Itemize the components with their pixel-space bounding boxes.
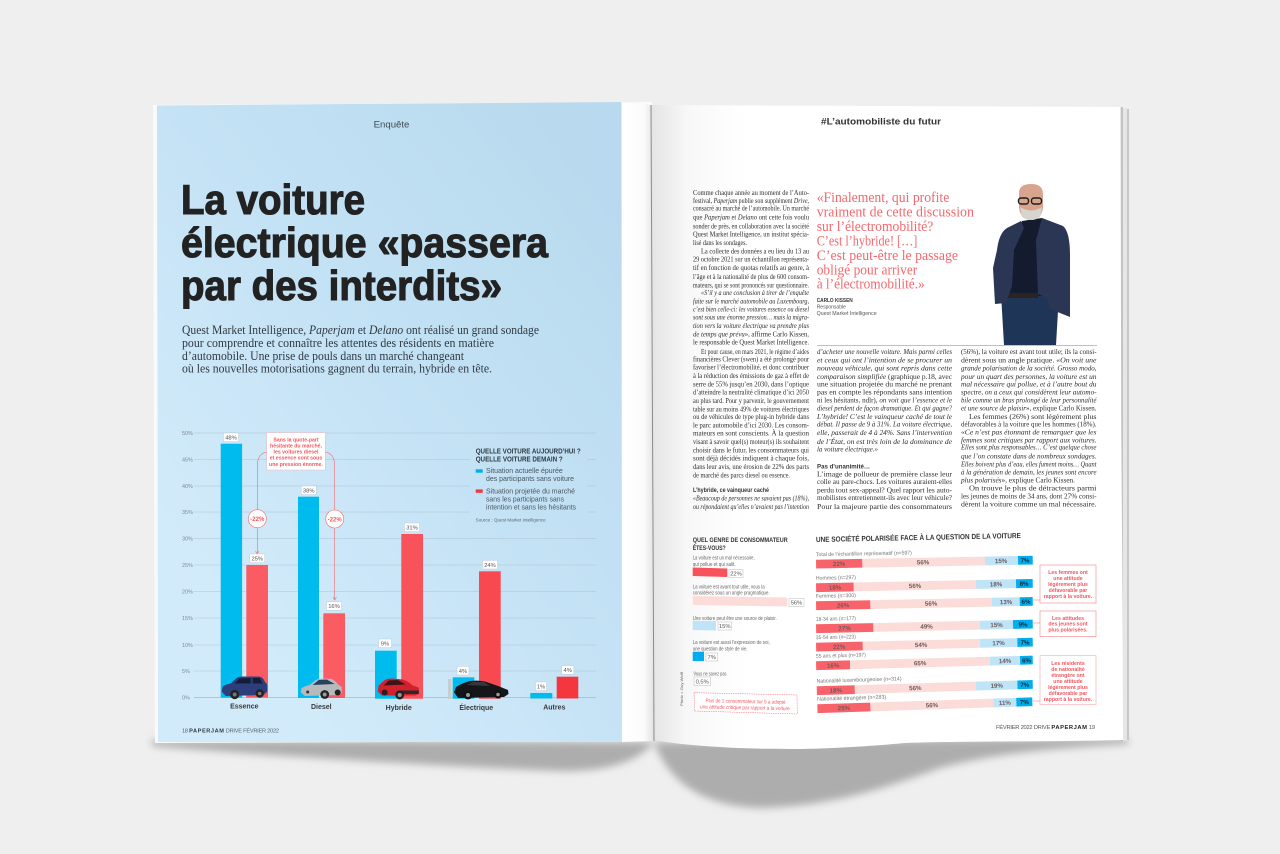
row: nationalite luxembourgeoise: 19% — [990, 683, 1004, 690]
polarised society chart — [816, 531, 1096, 713]
callout: femmes: défavorable par — [1049, 588, 1087, 594]
car: electrique and charger — [448, 679, 508, 699]
page edge stack — [1120, 107, 1129, 741]
badge: diesel -22% — [326, 510, 344, 528]
article column 3: grande polarisation de la société. Grosso modo, — [961, 364, 1097, 373]
row: plaisir — [693, 616, 777, 630]
intro text: pour comprendre et connaître les attentes des résidents en matière — [182, 336, 494, 350]
article column 2: une situation projetée du marché ne prenant — [817, 379, 953, 388]
callout: residents etrangers: légèrement plus — [1048, 685, 1088, 691]
car: essence — [222, 676, 267, 699]
article column 1: mateurs en sont conscients. À la question — [693, 428, 809, 438]
article column 1: favoriser l’électromobilité, et donc contribuer — [693, 363, 809, 372]
row: 35-54 ans: 35-54 ans (n=223) — [816, 634, 856, 641]
article column 2: perdu tout sex-appeal? Quel rapport les auto- — [817, 485, 952, 494]
row: ne sait pas: Vous ne savez pas — [694, 672, 727, 678]
diesel bars — [298, 497, 345, 698]
article column 1: sonder de près, en collaboration avec la société — [693, 221, 809, 230]
category labels — [230, 703, 565, 712]
row: nationalite luxembourgeoise: Nationalité luxembourgeoise (n=314) — [816, 676, 902, 685]
article column 1: serre de 55% jusqu’en 2030, dans l’optique — [693, 379, 810, 388]
page shadows — [152, 738, 1128, 808]
row: plaisir: Une voiture peut être une source de plaisir. — [693, 616, 777, 622]
row: 18-34 ans — [816, 612, 1033, 633]
callout: femmes: Les femmes ont — [1048, 570, 1088, 576]
row: nationalite etrangere: 25% — [838, 705, 851, 712]
article column 2 — [816, 347, 953, 511]
value tags: 16% — [328, 604, 340, 610]
article column 1: le parc automobile d’ici 2030. Les consom- — [693, 420, 809, 429]
autres bars — [530, 677, 578, 698]
chart heading: ÊTES-VOUS? — [693, 543, 726, 552]
callout: 1 consommateur sur 5: une attitude critique par rapport à la voiture. — [700, 704, 791, 712]
pull quote: «Finalement, qui profite — [817, 190, 949, 206]
row: 35-54 ans: 22% — [833, 644, 846, 651]
car: hybride — [378, 678, 419, 699]
article column 2: nouveau véhicule, qui sont repris dans cette — [817, 364, 953, 373]
right page — [651, 105, 1129, 749]
article column 1: ou répondaient qu’elles n’avaient pas l’intention — [693, 502, 809, 511]
row: utile — [693, 584, 804, 607]
article column 3: Les femmes (26%) sont légèrement plus — [969, 412, 1096, 421]
callout — [267, 433, 325, 470]
article column 3: les jeunes de moins de 34 ans, dont 27% consi- — [961, 491, 1097, 500]
callout: residents etrangers: rapport à la voiture. — [1044, 697, 1093, 703]
section label: Enquête — [374, 120, 409, 130]
article column 1: La collecte des données a eu lieu du 13 au — [701, 246, 809, 255]
article column 1: consacré au marché de l’automobile. Un marché — [693, 204, 809, 213]
y axis and grid: 30% — [182, 537, 193, 543]
row: femmes: 26% — [837, 602, 850, 610]
chart heading — [693, 537, 788, 552]
row: hommes: Hommes (n=297) — [816, 575, 856, 582]
callout: femmes: rapport à la voiture. — [1044, 594, 1093, 600]
row: hommes: 18% — [829, 584, 842, 592]
article column 3: mal nécessaire qui pollue, et à l’autre bout du — [961, 379, 1097, 388]
article column 2: ni les hésitants, ndlr), on voit que l’essence et le — [817, 395, 953, 404]
callout: hésitante du marché, — [270, 444, 323, 450]
category labels: Autres — [543, 704, 565, 712]
category labels: Essence — [230, 704, 259, 710]
article column 2: d’acheter une nouvelle voiture. Mais parmi celles — [817, 347, 952, 356]
article column 1: faite sur le marché automobile au Luxembourg, — [693, 297, 809, 306]
article column 3: à la génération de demain, les jeunes sont encore — [961, 468, 1097, 477]
article column 1: Et pour cause, en mars 2021, le régime d’aides — [701, 347, 809, 356]
article column 1: sont sous une énorme pression… mais la migra- — [693, 313, 809, 322]
row: nationalite etrangere: 56% — [926, 702, 939, 709]
row: total: 56% — [917, 559, 930, 567]
row: 55 ans et plus: 14% — [999, 658, 1012, 665]
left page — [153, 102, 654, 743]
article column 1: financières Clever (swen) a été prolongé pour — [693, 355, 809, 364]
article column 1: que Paperjam et Delano ont cette fois voulu — [693, 213, 809, 222]
callout: femmes: légèrement plus — [1048, 582, 1088, 588]
intro text: Quest Market Intelligence, Paperjam et Delano ont réalisé un grand sondage — [182, 323, 539, 337]
y axis and grid: 35% — [182, 510, 193, 516]
row: total: 22% — [833, 561, 846, 568]
page header: #L’automobiliste du futur — [821, 116, 941, 126]
car: diesel — [301, 678, 342, 699]
article column 1 — [693, 188, 810, 511]
row: 55 ans et plus: 6% — [1022, 657, 1032, 665]
article column 1: au plus tard. Pour y parvenir, le gouvernement — [693, 396, 810, 405]
value tags: 1% — [537, 684, 545, 690]
callout: femmes: une attitude — [1053, 576, 1083, 582]
row: 18-34 ans: 15% — [990, 622, 1003, 629]
value tags: 24% — [484, 563, 496, 569]
article column 3: plus polarisés», explique Carlo Kissen. — [960, 476, 1075, 485]
article column 1: de temps que prévu», affirme Carlo Kissen, — [693, 330, 809, 339]
badge: essence -22%: -22% — [250, 517, 265, 523]
row: femmes: 56% — [925, 601, 938, 608]
callout: residents etrangers — [1033, 656, 1096, 705]
row: total: 15% — [995, 558, 1008, 565]
legend: Situation projetée du marché — [486, 486, 575, 496]
callout: residents etrangers: défavorable par — [1049, 691, 1087, 697]
article column 3: défavorables à la voiture que les hommes (18%). — [961, 419, 1097, 428]
row: total: Total de l’échantillon représentatif (n=597) — [816, 550, 912, 558]
pull quote: vraiment de cette discussion — [817, 205, 975, 221]
article column 1: «S’il y a une conclusion à tirer de l’enquête — [701, 288, 809, 297]
callout: jeunes: Les attitudes — [1052, 616, 1084, 622]
callout: femmes — [1033, 565, 1096, 603]
legend: QUELLE VOITURE AUJOURD’HUI ? — [476, 446, 581, 456]
article column 1: table sur au moins 49% de voitures électriques — [693, 404, 809, 413]
article column 1: Quest Market Intelligence, un institut spécia- — [693, 230, 809, 239]
pull quote: sur l’électromobilité? — [817, 219, 933, 235]
row: hommes: 56% — [909, 583, 922, 590]
article column 1: tif en fonction de quotas relatifs au genre, à — [693, 263, 810, 272]
category labels: Hybride — [386, 705, 412, 712]
row: nationalite luxembourgeoise: 7% — [1020, 682, 1030, 689]
intro text: où les nouvelles motorisations gagnent du terrain, hybride en tête. — [182, 362, 492, 376]
y axis and grid: 45% — [182, 458, 193, 464]
row: 55 ans et plus: 65% — [914, 660, 927, 667]
main title: La voiture — [181, 176, 365, 223]
row: femmes: 6% — [1022, 599, 1031, 606]
main title: par des interdits» — [181, 262, 502, 309]
article column 1: lisé dans les sondages. — [693, 238, 747, 247]
article column 2: pas en compte les répondants sans intention — [817, 388, 952, 397]
article column 3: Elles sont plus responsables… C’est quelque chose — [960, 443, 1097, 452]
article column 3: On trouve le plus de détracteurs parmi — [969, 484, 1096, 493]
article column 1: mateurs, qui se sont prononcés sur questionnaire. — [693, 280, 809, 289]
quote attribution: Responsable — [817, 305, 846, 311]
row: ne sait pas — [694, 672, 727, 686]
category labels: Diesel — [311, 704, 332, 711]
article column 1: le responsable de Quest Market Intelligence. — [693, 338, 809, 347]
article column 1: «Beaucoup de personnes ne savaient pas (18%), — [693, 494, 809, 503]
article column 1: tion vers la voiture électrique va prendre plus — [693, 321, 809, 330]
article column 2: elle, passerait de 4 à 24%. Sans l’intervention — [817, 428, 952, 437]
article column 2: la voiture électrique.» — [817, 445, 878, 454]
article column 3: dèrent la voiture comme un mal nécessaire. — [961, 499, 1097, 508]
article column 2: comparaison simplifiée (graphique p.18, avec — [817, 372, 953, 381]
legend: QUELLE VOITURE DEMAIN ? — [476, 454, 563, 464]
pull quote: C’est l’hybride! […] — [817, 233, 917, 249]
y axis and grid: 50% — [182, 431, 193, 437]
row: 18-34 ans: 9% — [1019, 621, 1028, 629]
category labels: Électrique — [459, 703, 493, 712]
row: mal necessaire: qui pollue et qui salit. — [693, 562, 736, 568]
quote attribution — [817, 298, 877, 317]
row: 35-54 ans: 54% — [915, 642, 928, 649]
row: nationalite etrangere: 11% — [999, 700, 1011, 707]
article column 1: 29 octobre 2021 sur un échantillon représenta- — [693, 255, 809, 264]
row: 35-54 ans: 7% — [1021, 639, 1030, 647]
y axis and grid: 5% — [182, 669, 190, 675]
legend: intention et sans les hésitants — [486, 502, 576, 512]
row: nationalite etrangere — [817, 690, 1032, 713]
y axis and grid: 0% — [182, 696, 190, 702]
row: nationalite luxembourgeoise — [816, 673, 1033, 695]
pull quote — [817, 190, 975, 292]
row: 35-54 ans: 17% — [992, 640, 1005, 647]
article column 3: et une source de plaisir», explique Carlo Kissen. — [961, 404, 1097, 413]
value tags: 4% — [459, 669, 467, 675]
row: 55 ans et plus: 16% — [827, 662, 840, 670]
article column 2: mobilistes entretiennent-ils avec leur véhicule? — [817, 493, 953, 502]
row: utile: considérez sous un angle pragmatique. — [693, 590, 770, 596]
legend: sans les participants sans — [486, 494, 564, 504]
callout: Sans la quote-part — [273, 438, 319, 444]
article column 1: sont déjà décidés indiquent à chaque fois, — [693, 454, 809, 463]
row: hommes: 18% — [990, 581, 1003, 589]
quote attribution: Quest Market Intelligence — [817, 311, 877, 317]
article column 3: spectre, on a ceux qui considèrent leur automo- — [961, 387, 1097, 396]
article column 3: «Ce n’est pas étonnant de remarquer que les — [961, 427, 1096, 436]
y axis and grid — [182, 431, 596, 702]
article column 1: d’atteindre la neutralité climatique d’ici 2050 — [693, 388, 809, 397]
callout: residents etrangers: étrangère ont — [1051, 673, 1085, 679]
article column 2: diesel perdent de façon dramatique. Et qui gagne? — [817, 404, 952, 413]
row: expression de soi: une question de style de vie. — [693, 646, 748, 652]
row: femmes: Femmes (n=300) — [816, 593, 856, 600]
hybride bars — [375, 534, 423, 699]
article column 1: dans leur avis, une érosion de 22% des parts — [693, 462, 809, 471]
article column 1: choisir dans le futur, les consommateurs qui — [693, 445, 809, 454]
y axis and grid: 10% — [182, 643, 193, 649]
page sheet — [651, 105, 1123, 749]
row: mal necessaire: La voiture est un mal nécessaire, — [693, 556, 755, 562]
callout: une pression énorme. — [269, 462, 324, 468]
legend: Source : Quest Market Intelligence — [476, 518, 546, 522]
y axis and grid: 25% — [182, 563, 193, 569]
row: total — [816, 548, 1033, 568]
legend: des participants sans voiture — [486, 474, 574, 483]
callout: residents etrangers: une attitude — [1053, 679, 1083, 685]
row: plaisir: 15% — [719, 624, 731, 630]
right folio: FÉVRIER 2022 DRIVE PAPERJAM 19 — [996, 724, 1095, 731]
blue page background — [157, 102, 622, 742]
main title: électrique «passera — [181, 219, 549, 266]
callout: jeunes: des jeunes sont — [1048, 622, 1088, 628]
article column 2: et ceux qui ont l’intention de se procurer un — [817, 355, 952, 364]
article column 3: que l’on constate dans de nombreux sondages. — [961, 451, 1097, 460]
intro text — [182, 323, 539, 376]
article column 1: c’est bien celle-ci: les voitures essence ou diesel — [693, 305, 809, 314]
article column 2: de l’État, on est très loin de la dominance de — [817, 436, 953, 446]
callout: les voitures diesel — [274, 450, 319, 456]
quote attribution: CARLO KISSEN — [817, 298, 853, 304]
callout: jeunes — [1033, 611, 1096, 637]
y axis and grid: 20% — [182, 589, 193, 595]
article column 1: L’hybride, ce vainqueur caché — [693, 487, 769, 494]
article column 2: Pas d’unanimité… — [817, 463, 870, 470]
article column 2: L’hybride! C’est le vainqueur caché de tout le — [816, 412, 953, 421]
row: hommes: 8% — [1020, 581, 1029, 588]
badge: essence -22% — [248, 510, 266, 528]
article column 1: de marché des parcs diesel ou essence. — [693, 470, 790, 479]
essence bars — [221, 444, 268, 698]
legend: Situation actuelle épurée — [486, 466, 563, 475]
main title — [181, 176, 549, 309]
pull quote: C’est peut-être le passage — [817, 248, 958, 264]
row: expression de soi — [693, 640, 770, 661]
row: nationalite etrangere: Nationalité étrangère (n=283) — [817, 695, 886, 703]
row: nationalite luxembourgeoise: 18% — [830, 687, 843, 695]
article column 1: festival, Paperjam publie son supplément Drive, — [693, 196, 809, 205]
connector arrows — [256, 452, 336, 600]
y axis and grid: 15% — [182, 616, 193, 622]
row: utile: La voiture est avant tout utile, vous la — [693, 584, 765, 590]
row: nationalite luxembourgeoise: 56% — [909, 685, 922, 692]
row: femmes: 13% — [1000, 599, 1013, 606]
article column 1: Comme chaque année au moment de l’Auto- — [693, 188, 809, 197]
article column 2: colle au pare-chocs. Les voitures auraient-elles — [817, 477, 952, 486]
row: 18-34 ans: 18-34 ans (n=177) — [816, 616, 856, 623]
badge: diesel -22%: -22% — [328, 517, 342, 523]
callout: residents etrangers: Les résidents — [1051, 661, 1085, 667]
value tags: 38% — [303, 488, 315, 494]
row: nationalite etrangere: 7% — [1020, 699, 1029, 706]
callout: et essence sont sous — [270, 456, 322, 462]
value tags — [224, 433, 574, 691]
article column 2: L’image de pollueur de première classe leur — [817, 469, 952, 478]
article column 3: femmes sont critiques par rapport aux voitures. — [961, 435, 1097, 444]
portrait: Carlo Kissen — [993, 184, 1070, 345]
pull quote: obligé pour arriver — [817, 262, 917, 278]
article column 2: Pour la majeure partie des consommateurs — [817, 502, 952, 511]
callout: residents etrangers: de nationalité — [1051, 667, 1085, 673]
article column 3: bile comme un bras prolongé de leur personnalité — [961, 395, 1097, 404]
row: expression de soi: La voiture est aussi l’expression de soi, — [693, 640, 770, 646]
row: 35-54 ans — [816, 630, 1033, 651]
value tags: 48% — [225, 435, 237, 441]
row: 18-34 ans: 27% — [838, 625, 851, 633]
value tags: 4% — [564, 668, 572, 674]
gutter strip — [621, 102, 654, 742]
callout: jeunes: plus polarisées. — [1048, 628, 1088, 634]
callout: 1 consommateur sur 5: Plus de 1 consommateur sur 5 a adopté — [705, 698, 786, 706]
electrique bars — [453, 571, 501, 699]
row: 55 ans et plus — [816, 648, 1033, 670]
row: femmes — [816, 589, 1033, 610]
bar chart: quelle voiture — [182, 431, 596, 712]
article column 1: visant à savoir quel(s) moteur(s) ils souhaitent — [693, 437, 810, 446]
row: expression de soi: 7% — [708, 655, 716, 661]
photo credit: Photo = Guy Wolff — [679, 671, 684, 706]
row: mal necessaire: 22% — [730, 572, 742, 578]
value tags: 9% — [381, 641, 389, 647]
article column 3: Elles boivent plus d’eau, elles fument moins… Quant — [960, 459, 1097, 468]
spine line — [651, 105, 654, 741]
row: 18-34 ans: 49% — [920, 623, 933, 631]
chart heading: UNE SOCIÉTÉ POLARISÉE FACE À LA QUESTION DE LA VOITURE — [816, 531, 1021, 544]
article column 1: ou de véhicules de type plug-in hybride dans — [693, 412, 809, 421]
chart heading: QUEL GENRE DE CONSOMMATEUR — [693, 537, 788, 544]
article column 3: (56%), la voiture est avant tout utile; ils la consi- — [961, 347, 1097, 356]
value tags: 25% — [251, 556, 263, 562]
intro text: d’automobile. Une prise de pouls dans un marché changeant — [182, 349, 464, 363]
row: utile: 56% — [791, 601, 802, 607]
row: total: 7% — [1021, 557, 1030, 565]
legend — [476, 446, 581, 522]
article column 3 — [960, 347, 1097, 508]
article column 2: débat. Il passe de 9 à 31%. La voiture électrique, — [817, 420, 952, 429]
row: 55 ans et plus: 55 ans et plus (n=197) — [816, 652, 866, 660]
callout: 1 consommateur sur 5 — [694, 693, 797, 714]
article column 1: à la réduction des émissions de gaz à effet de — [693, 371, 809, 380]
pull quote: à l’électromobilité.» — [817, 276, 925, 292]
article column 3: pour un quart des personnes, la voiture est un — [960, 372, 1097, 381]
consumer type chart — [693, 537, 804, 714]
article column 3: dèrent sous un angle pratique. «On voit une — [961, 355, 1097, 364]
row: hommes — [816, 571, 1033, 592]
y axis and grid: 40% — [182, 484, 193, 490]
value tags: 31% — [406, 525, 418, 531]
left folio: 18 PAPERJAM DRIVE FÉVRIER 2022 — [182, 728, 279, 734]
row: ne sait pas: 0,5% — [696, 680, 709, 686]
row: mal necessaire — [693, 556, 755, 578]
article column 1: l’âge et à la nationalité de plus de 600 consom- — [693, 272, 809, 281]
